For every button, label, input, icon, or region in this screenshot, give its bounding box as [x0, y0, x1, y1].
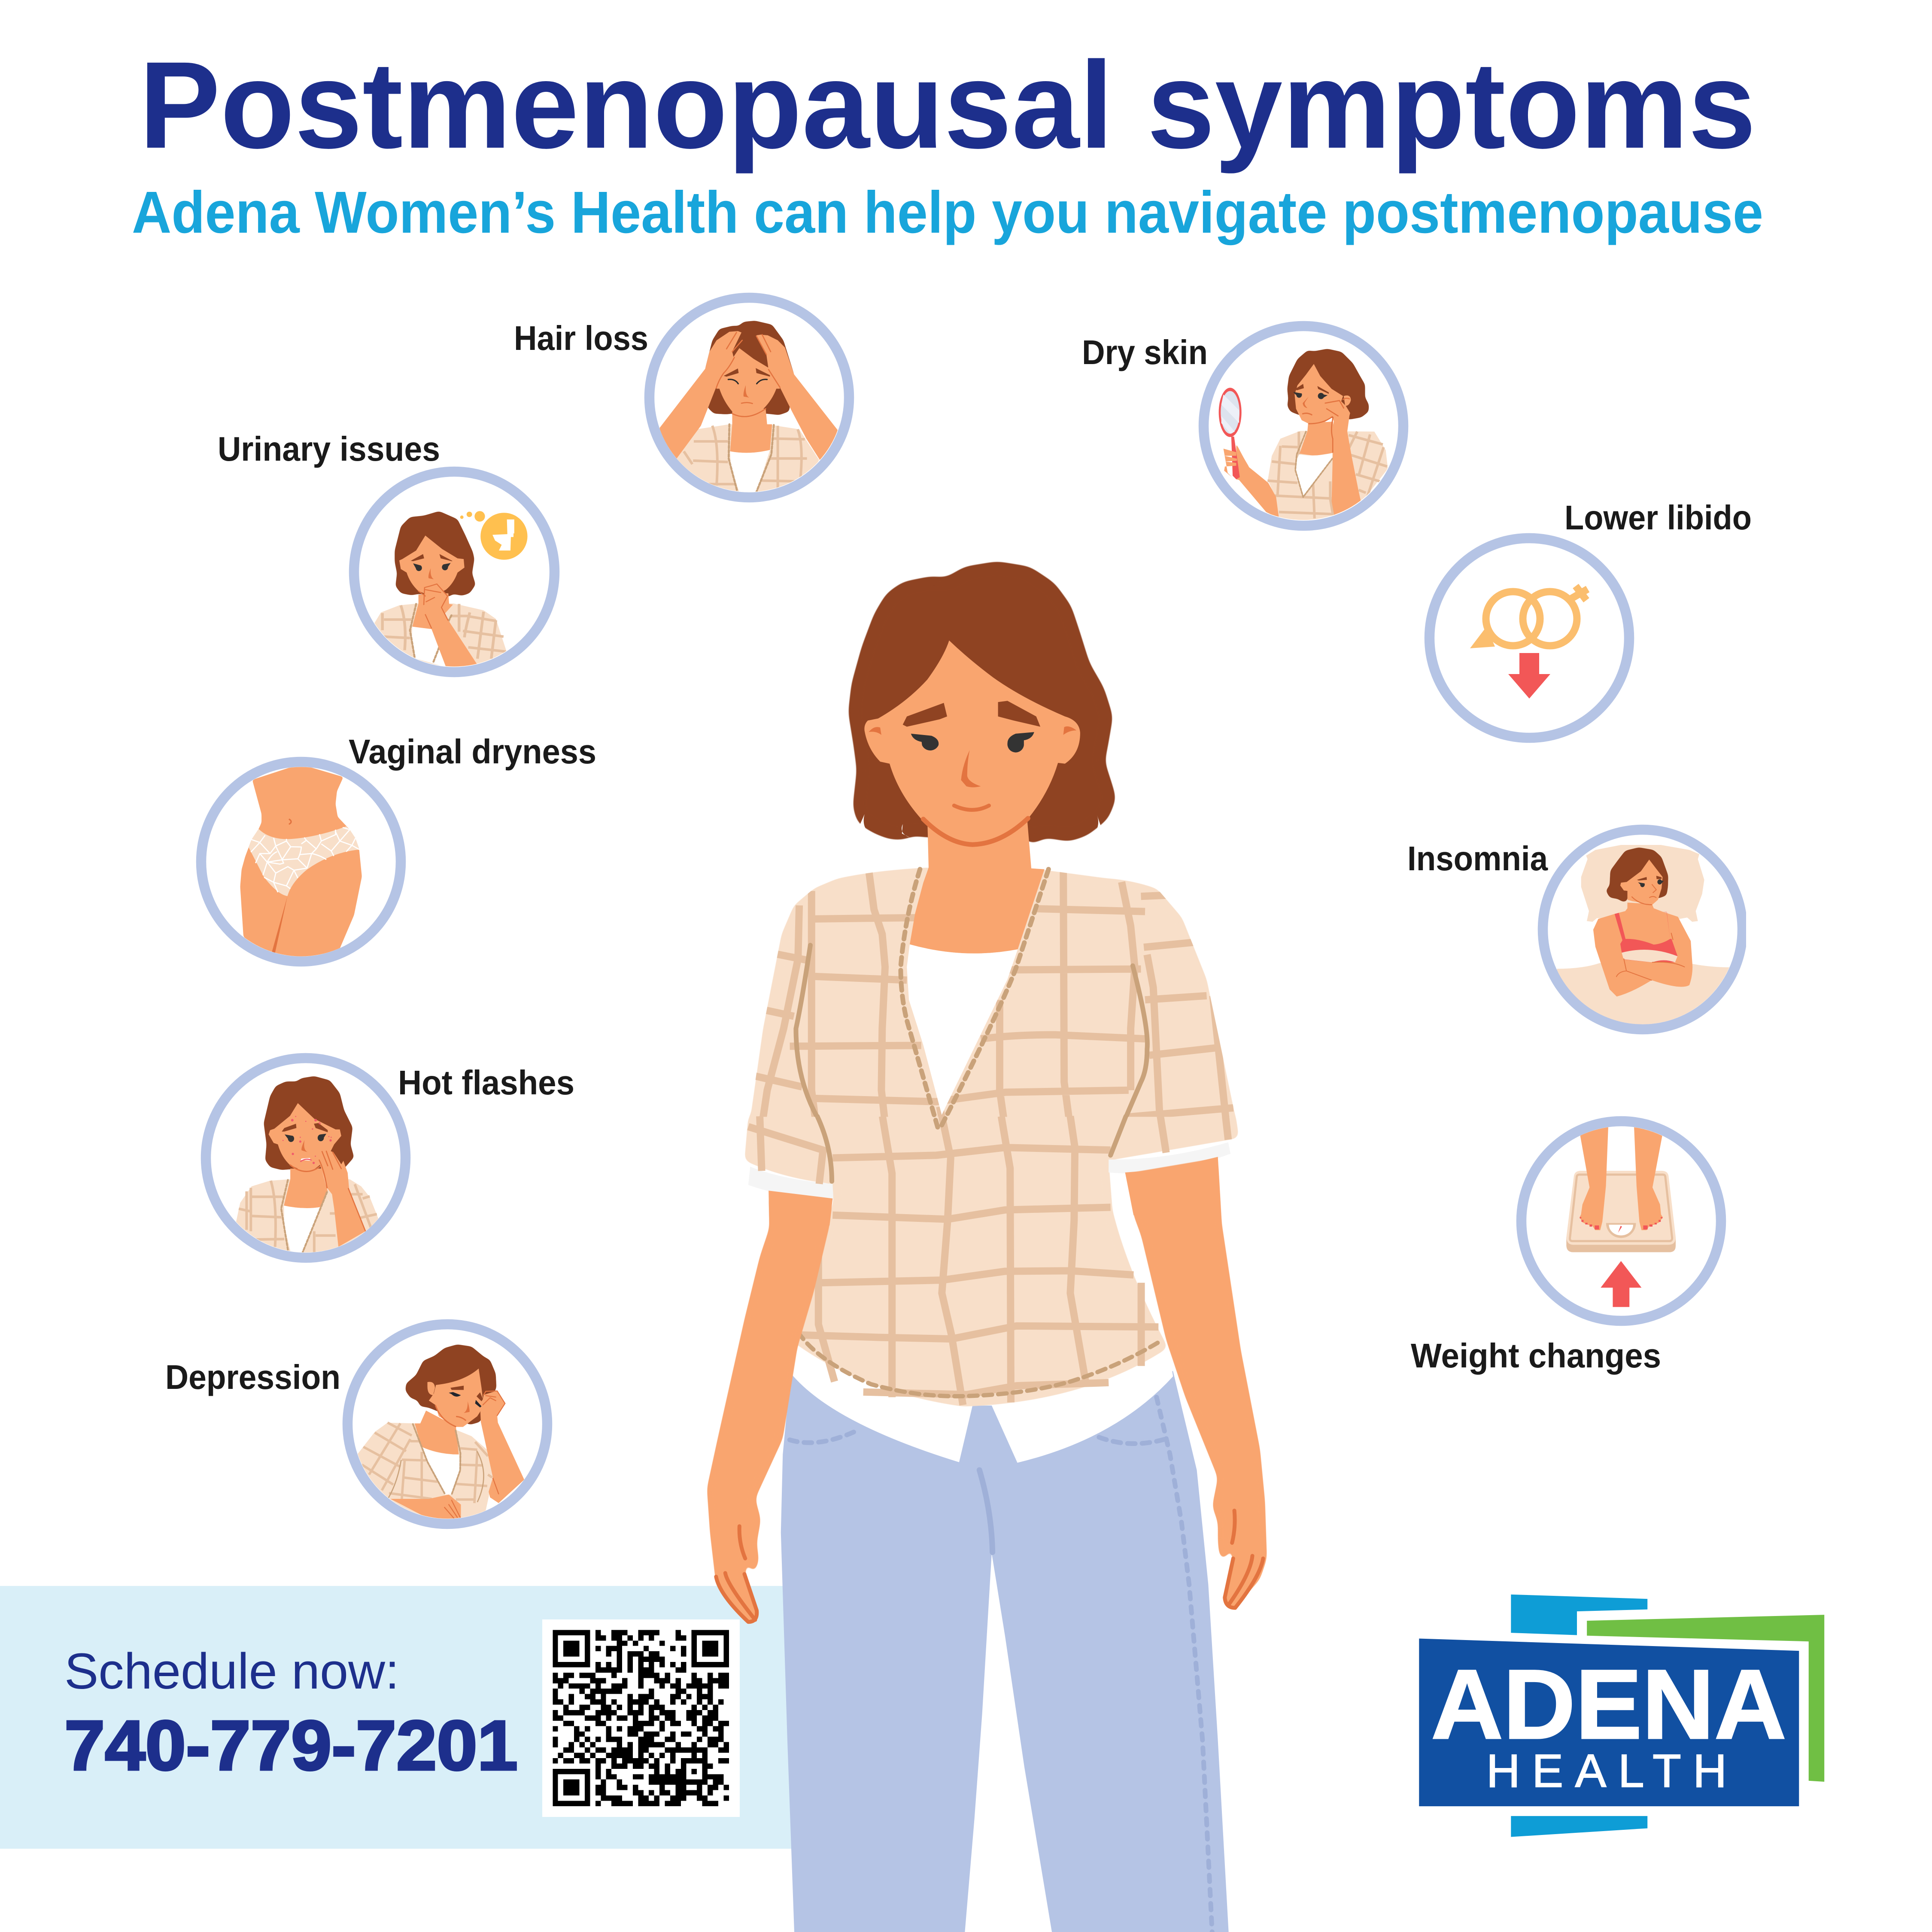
label: vaginal dryness: Vaginal dryness — [349, 732, 596, 771]
medallion: hot flashes — [206, 1058, 405, 1258]
shirt cuffs — [748, 1142, 1230, 1200]
label: hair loss: Hair loss — [514, 319, 648, 357]
shirt body — [744, 868, 1239, 1406]
face — [864, 641, 1080, 847]
medallion: dry skin — [1204, 326, 1403, 526]
icon: up arrow — [1601, 1261, 1641, 1307]
icon: down arrow — [1508, 653, 1550, 699]
right arm — [1125, 1157, 1267, 1608]
hair back — [848, 561, 1116, 846]
label: urinary issues: Urinary issues — [218, 430, 440, 468]
shirt lower plaid — [748, 1116, 1228, 1405]
label: depression: Depression — [165, 1358, 340, 1396]
QR code — [542, 1619, 740, 1817]
medallion: depression — [348, 1324, 547, 1527]
phone number: 740-779-7201 — [64, 1706, 518, 1785]
shirt upper plaid — [756, 872, 1234, 1117]
label: hot flashes: Hot flashes — [398, 1063, 574, 1102]
left arm — [707, 1191, 832, 1623]
jeans — [781, 1345, 1229, 1932]
title: Postmenopausal symptoms — [139, 36, 1756, 175]
medallion: weight changes — [1522, 1121, 1721, 1321]
subtitle: Adena Women’s Health can help you navigate postmenopause — [132, 179, 1763, 246]
central woman figure — [707, 561, 1267, 1932]
label: weight changes: Weight changes — [1411, 1337, 1661, 1375]
medallion: lower libido — [1430, 538, 1629, 738]
neck and chest — [901, 819, 1048, 1129]
icon: Adena Health logo: HEALTH — [1486, 1745, 1727, 1797]
medallion: hair loss — [649, 298, 849, 497]
jeans stitching — [790, 1397, 1212, 1932]
medallion: insomnia — [1543, 829, 1750, 1030]
icon: gender symbols — [1470, 586, 1588, 648]
medallion: urinary issues — [354, 471, 555, 673]
icon: Adena Health logo: ADENA — [1431, 1649, 1786, 1759]
panel: schedule band — [0, 1586, 816, 1849]
schedule label: Schedule now: — [64, 1643, 399, 1700]
label: lower libido: Lower libido — [1564, 498, 1752, 537]
label: insomnia: Insomnia — [1407, 839, 1548, 878]
label: dry skin: Dry skin — [1082, 333, 1208, 371]
white undershirt hem — [790, 1345, 1173, 1463]
icon: Adena Health logo — [1419, 1595, 1824, 1837]
medallion: vaginal dryness — [201, 762, 401, 965]
